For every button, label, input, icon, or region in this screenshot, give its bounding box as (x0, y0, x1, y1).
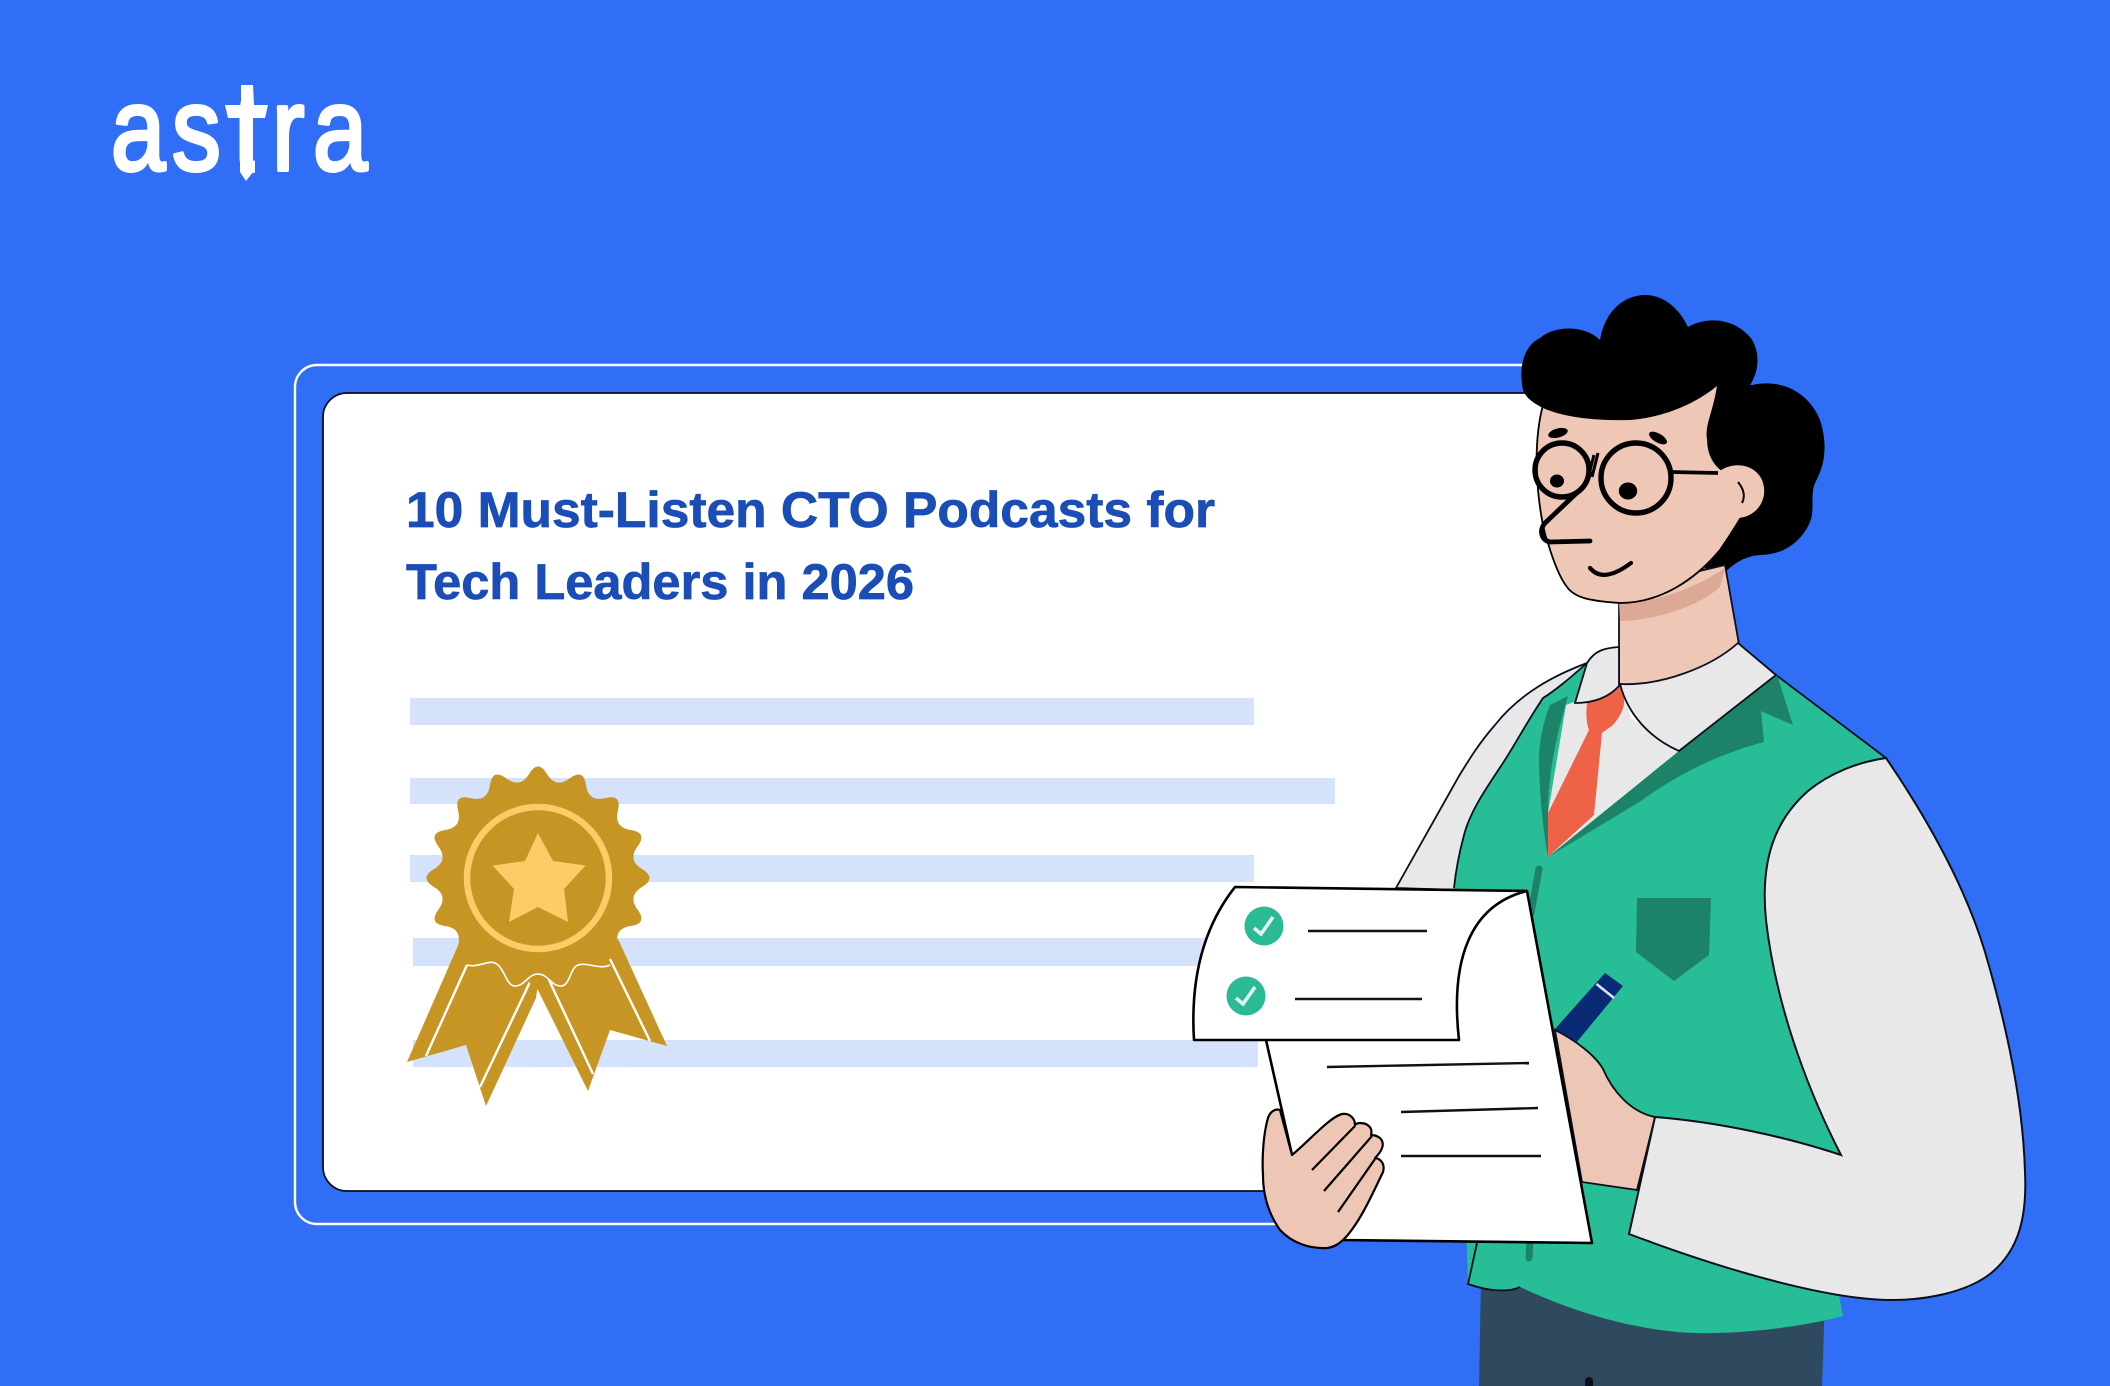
back shoulder (1396, 663, 1587, 890)
right hand (1555, 1030, 1655, 1190)
sleeve (1629, 758, 2025, 1300)
eyes (1550, 474, 1637, 500)
neck shadow (1619, 568, 1725, 621)
trousers (1479, 1280, 1825, 1386)
icon: award medal (407, 766, 667, 1106)
vest (1454, 663, 1900, 1333)
logo: astra: astra (111, 63, 368, 196)
ear (1718, 465, 1764, 518)
left collar (1575, 647, 1619, 703)
eyebrows (1547, 426, 1669, 447)
inner ear (1738, 482, 1744, 503)
icon: pen (1555, 973, 1623, 1043)
right lapel (1548, 675, 1793, 857)
title: Tech Leaders in 2026 (406, 554, 914, 610)
character: man with vest (1193, 295, 2025, 1386)
ribbon tails (407, 939, 667, 1106)
left lapel (1539, 666, 1585, 857)
vest outlines (1454, 663, 1886, 1290)
medal star (492, 833, 586, 922)
shirt front (1548, 684, 1679, 857)
left hand (1263, 1109, 1384, 1248)
title (406, 482, 1215, 610)
panel: outer frame (295, 365, 1680, 1224)
icon: check 1 (1244, 906, 1284, 946)
placeholder text lines (410, 698, 1335, 1067)
necktie (1548, 686, 1624, 857)
face (1537, 385, 1745, 603)
right collar (1620, 643, 1776, 751)
title: 10 Must-Listen CTO Podcasts for (406, 482, 1215, 538)
ribbon highlights (426, 959, 650, 1087)
panel: certificate card (323, 393, 1653, 1191)
flap lines (1295, 931, 1427, 999)
paper flap (1193, 887, 1527, 1040)
vest pocket (1636, 898, 1711, 981)
mouth (1590, 563, 1631, 575)
rosette lower outline (467, 962, 610, 986)
glasses (1535, 443, 1718, 513)
icon: check 2 (1226, 976, 1266, 1016)
nose (1542, 487, 1590, 542)
rosette (426, 766, 650, 990)
paper lines (1327, 1063, 1541, 1156)
hair back (1700, 380, 1825, 578)
trouser fly mark (1585, 1377, 1593, 1386)
paper sheet (1193, 887, 1592, 1243)
hair front (1521, 295, 1758, 420)
medal ring (467, 807, 609, 949)
neck (1619, 565, 1740, 695)
vest seam (1529, 869, 1539, 1258)
